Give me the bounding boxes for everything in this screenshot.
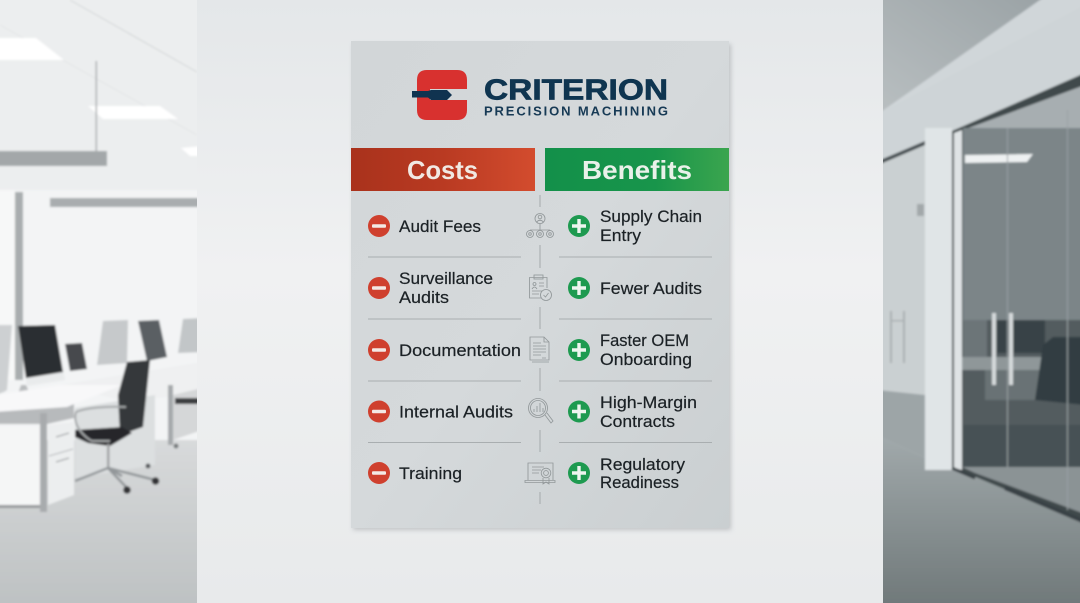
benefit: supply chain entry: Supply Chain (600, 207, 702, 226)
logo tagline: PRECISION MACHINING (484, 104, 668, 118)
wall (197, 0, 883, 603)
cost: audit fees: Audit Fees (399, 217, 481, 236)
logo wordmark: CRITERION (484, 74, 668, 106)
cost: training: Training (399, 464, 462, 483)
centre icons (525, 214, 555, 484)
heading: costs (351, 148, 535, 191)
cost: training (368, 462, 462, 484)
icon: clipboard check (530, 275, 552, 300)
benefit: supply chain entry: Entry (600, 226, 642, 245)
cost: documentation (368, 339, 521, 361)
cost: audit fees (368, 215, 481, 237)
benefit: high-margin contracts (568, 393, 697, 431)
benefit: supply chain entry (568, 207, 702, 245)
cost: surveillance audits (368, 269, 493, 307)
sign shadow (353, 44, 731, 530)
heading: costs: Costs (407, 155, 478, 185)
logo mark (412, 70, 467, 120)
cost: internal audits: Internal Audits (399, 402, 513, 422)
cost: surveillance audits: Surveillance (399, 269, 493, 288)
heading: benefits (545, 148, 729, 191)
benefit: regulatory readiness (568, 455, 686, 492)
icon: org chart (526, 214, 554, 238)
left office scene (0, 0, 202, 603)
cost: documentation: Documentation (399, 341, 521, 360)
icon: laptop certificate (525, 463, 555, 484)
benefits column (568, 207, 702, 492)
benefit: faster oem onboarding (568, 331, 692, 369)
icon: document (530, 337, 549, 362)
cost: surveillance audits: Audits (399, 288, 449, 307)
row dividers and centre line (368, 195, 712, 504)
benefit: regulatory readiness: Regulatory (600, 455, 686, 474)
icon: magnifier chart (528, 398, 553, 423)
cost: internal audits (368, 400, 513, 422)
heading: benefits: Benefits (582, 155, 692, 185)
benefit: fewer audits (568, 277, 702, 299)
sign board (351, 41, 729, 528)
benefit: high-margin contracts: High-Margin (600, 393, 697, 412)
benefit: high-margin contracts: Contracts (600, 412, 675, 431)
right corridor scene (878, 0, 1080, 603)
benefit: faster oem onboarding: Faster OEM (600, 331, 689, 350)
benefit: faster oem onboarding: Onboarding (600, 350, 692, 369)
benefit: regulatory readiness: Readiness (600, 473, 679, 492)
costs column (368, 215, 521, 484)
benefit: fewer audits: Fewer Audits (600, 279, 702, 298)
sign panel (351, 41, 731, 530)
logo (412, 70, 668, 120)
